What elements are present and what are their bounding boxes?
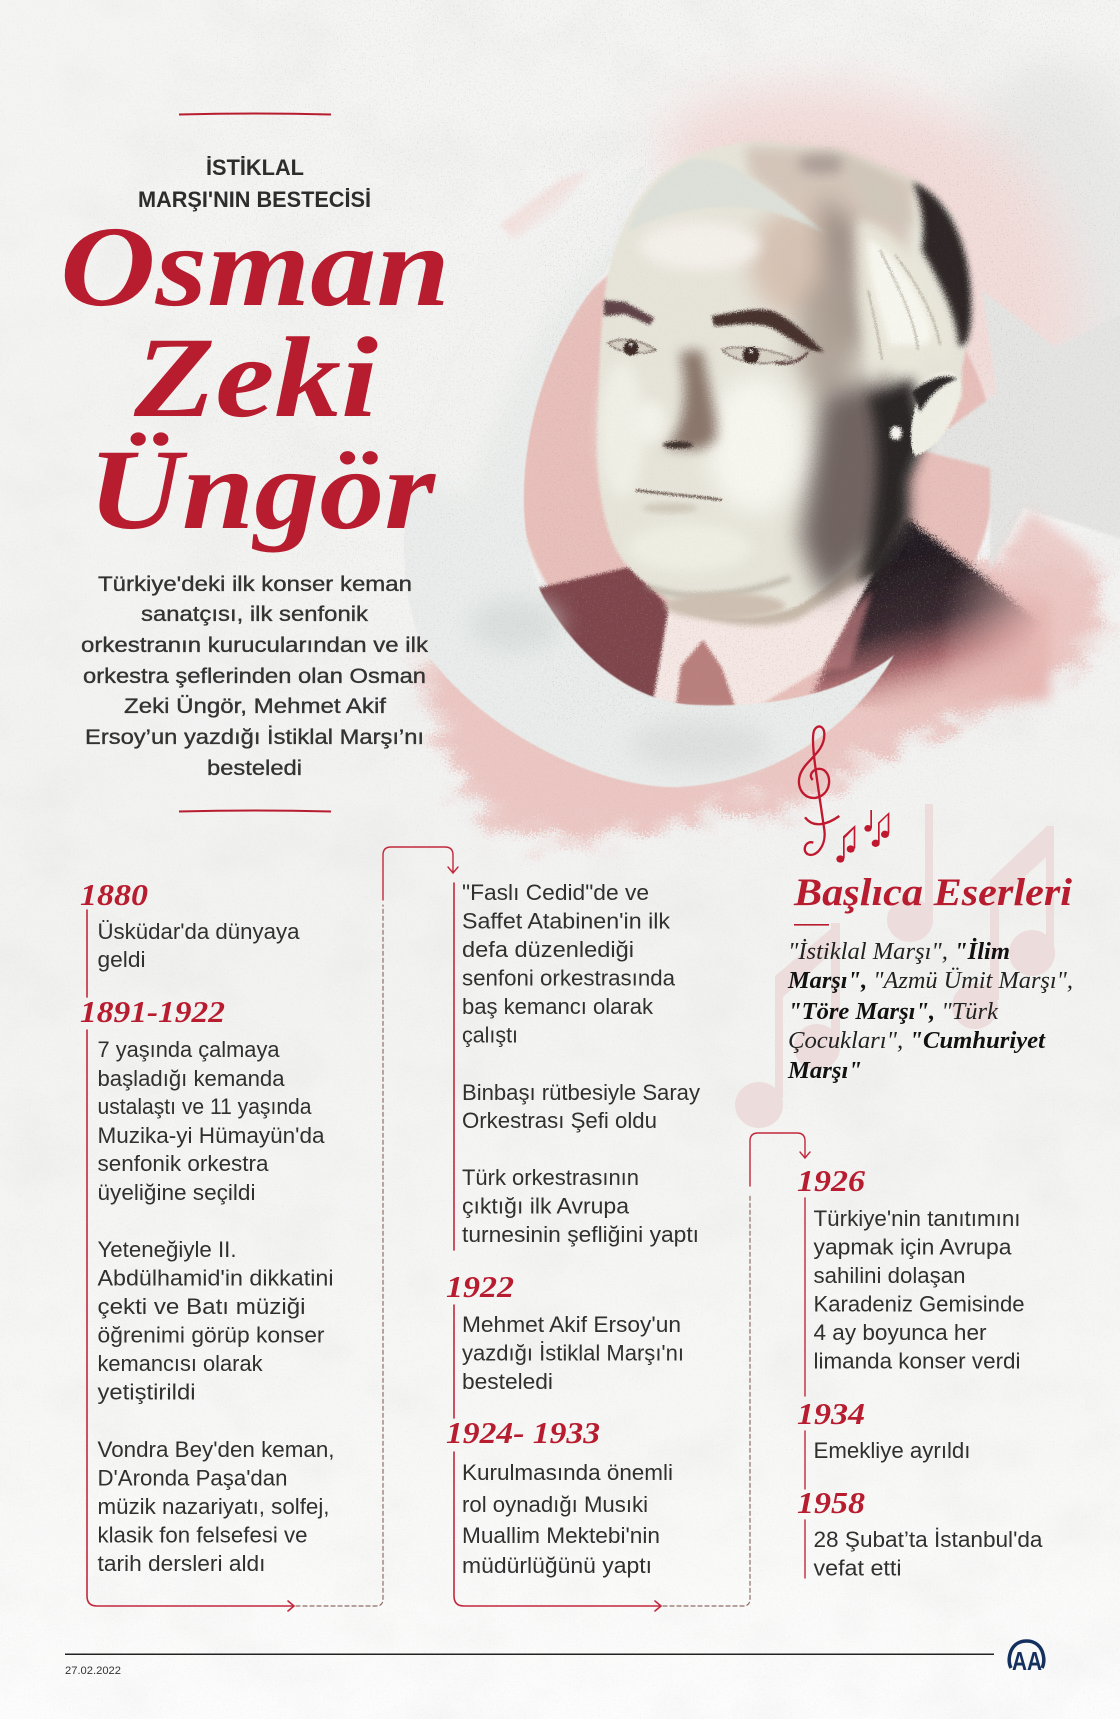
ear xyxy=(890,372,961,456)
intro text: Ersoy’un yazdığı İstiklal Marşı’nı xyxy=(85,726,424,749)
text 1891-1922: çekti ve Batı müziği xyxy=(98,1294,306,1319)
crown tint xyxy=(745,146,914,300)
connector 1 to 2 dashed xyxy=(296,905,383,1606)
main works list: Çocukları", "Cumhuriyet xyxy=(788,1027,1046,1054)
text 1891-1922: kemancısı olarak xyxy=(98,1351,263,1376)
text continuing 1891-1922: Türk orkestrasının xyxy=(462,1165,639,1190)
text continuing 1891-1922: çalıştı xyxy=(462,1022,518,1048)
text 1880: Üsküdar'da dünyaya xyxy=(98,919,300,944)
text 1891-1922: ustalaştı ve 11 yaşında xyxy=(98,1094,312,1119)
nose highlight xyxy=(634,401,666,443)
suit collar side tint xyxy=(820,590,872,672)
footer rule xyxy=(65,1654,994,1655)
chin crease xyxy=(645,578,790,596)
text 1926 xyxy=(814,1206,1024,1374)
text 1891-1922: öğrenimi görüp konser xyxy=(98,1322,324,1348)
text 1891-1922: klasik fon felsefesi ve xyxy=(98,1522,308,1548)
crown grey patch xyxy=(798,154,846,174)
year 1880: 1880 xyxy=(80,877,148,912)
forehead pink shade xyxy=(749,207,841,317)
column 1 lines xyxy=(87,910,294,1611)
white crescent xyxy=(404,165,894,787)
main works list: "Töre Marşı", "Türk xyxy=(788,998,999,1025)
text continuing 1891-1922: baş kemancı olarak xyxy=(462,994,654,1019)
timeline connectors xyxy=(87,847,810,1611)
text continuing 1891-1922: turnesinin şefliğini yaptı xyxy=(462,1222,699,1247)
title: name: Zeki xyxy=(133,314,378,441)
footer date: 27.02.2022 xyxy=(65,1665,121,1677)
year 1922: 1922 xyxy=(446,1269,514,1304)
intro text: besteledi xyxy=(207,757,302,780)
text 1891-1922: Vondra Bey'den keman, xyxy=(98,1437,334,1462)
text 1926: yapmak için Avrupa xyxy=(814,1234,1012,1260)
left suit shoulder xyxy=(530,567,672,720)
text continuing 1891-1922: senfoni orkestrasında xyxy=(462,966,676,990)
mouth xyxy=(636,490,722,500)
temple shade xyxy=(822,195,862,350)
face highlights xyxy=(707,377,803,513)
heading: subtitle: İSTİKLAL xyxy=(206,155,304,180)
text 1891-1922: 7 yaşında çalmaya xyxy=(98,1037,280,1062)
upper cheek shade xyxy=(796,280,860,400)
intro text xyxy=(81,573,429,780)
top divider xyxy=(179,114,331,115)
title: name: Üngör xyxy=(88,426,436,553)
forehead wedge highlight xyxy=(628,159,826,234)
text continuing 1891-1922: Saffet Atabinen'in ilk xyxy=(462,908,671,934)
dark hair xyxy=(913,182,971,346)
timeline: column 3 xyxy=(797,1163,1043,1580)
white hair soft base xyxy=(857,218,953,385)
forehead highlight xyxy=(640,222,760,270)
year 1924-1933: 1924- 1933 xyxy=(446,1415,600,1450)
text 1891-1922: üyeliğine seçildi xyxy=(98,1180,256,1205)
year 1926: 1926 xyxy=(797,1163,866,1198)
text 1926: limanda konser verdi xyxy=(814,1348,1020,1374)
connector 2 to 3 top arrow xyxy=(750,1133,810,1186)
text 1922: besteledi xyxy=(462,1369,553,1394)
white hair bright xyxy=(868,240,931,345)
intro text: sanatçısı, ilk senfonik xyxy=(141,603,369,626)
short divider xyxy=(794,924,829,926)
right suit fade xyxy=(945,560,1050,700)
intro text: Zeki Üngör, Mehmet Akif xyxy=(124,695,386,718)
timeline: column 2 xyxy=(446,880,700,1578)
title: name xyxy=(60,203,450,553)
bottom divider xyxy=(179,810,331,812)
cheek shade xyxy=(800,375,905,600)
text 1922: yazdığı İstiklal Marşı'nı xyxy=(462,1340,684,1366)
crescent shading: bottom xyxy=(630,721,770,769)
text 1924-1933: rol oynadığı Musıki xyxy=(462,1492,648,1517)
intro text: orkestra şeflerinden olan Osman xyxy=(83,665,426,688)
heading: subtitle: MARŞI'NIN BESTECİSİ xyxy=(138,187,371,212)
column 3 lines xyxy=(804,1198,806,1578)
background: red flag brush with crescent and star xyxy=(425,60,1120,839)
text 1926: 4 ay boyunca her xyxy=(814,1320,986,1345)
text 1891-1922: başladığı kemanda xyxy=(98,1066,285,1091)
text 1924-1933: müdürlüğünü yaptı xyxy=(462,1553,652,1578)
left eyebrow xyxy=(604,300,654,325)
icon: treble clef and notes xyxy=(799,726,889,863)
intro text: Türkiye'deki ilk konser keman xyxy=(98,573,412,596)
lower right star tip wash xyxy=(1000,510,1090,610)
text 1924-1933: Muallim Mektebi'nin xyxy=(462,1523,660,1548)
text 1924-1933: Kurulmasında önemli xyxy=(462,1460,673,1485)
pale top wash xyxy=(660,85,1080,420)
hair crown xyxy=(840,158,915,225)
nose shadow xyxy=(664,350,716,450)
tie xyxy=(674,640,738,720)
shirt collar xyxy=(650,572,874,720)
main works list xyxy=(787,937,1073,1084)
main works list: "İstiklal Marşı", "İlim xyxy=(788,937,1010,965)
text continuing 1891-1922: Binbaşı rütbesiyle Saray xyxy=(462,1080,700,1105)
wisp pink xyxy=(500,170,590,240)
portrait grain xyxy=(540,130,1040,720)
text 1891-1922: müzik nazariyatı, solfej, xyxy=(98,1494,330,1519)
crescent fade to paper on upper left xyxy=(400,140,650,500)
heading: main works: Başlıca Eserleri xyxy=(793,871,1072,914)
lower chin tint xyxy=(665,593,785,619)
year 1934: 1934 xyxy=(797,1396,865,1431)
text continuing 1891-1922: Orkestrası Şefi oldu xyxy=(462,1108,657,1133)
top right grey wash xyxy=(940,60,1120,480)
title: name: Osman xyxy=(60,203,450,330)
text 1891-1922: Abdülhamid'in dikkatini xyxy=(98,1266,334,1290)
portrait: Osman Zeki Üngör xyxy=(597,142,971,625)
text 1891-1922: yetiştirildi xyxy=(98,1380,196,1404)
pink brush wash: lower band xyxy=(425,560,1100,839)
text continuing 1891-1922: çıktığı ilk Avrupa xyxy=(462,1194,630,1218)
text 1926: sahilini dolaşan xyxy=(814,1263,966,1288)
text 1958: 28 Şubat’ta İstanbul'da xyxy=(814,1527,1043,1552)
text 1922 xyxy=(462,1312,684,1394)
main works list: Marşı", "Azmü Ümit Marşı", xyxy=(787,966,1073,994)
neck xyxy=(660,440,905,625)
text continuing 1891-1922: defa düzenlediği xyxy=(462,937,634,962)
text 1880: geldi xyxy=(98,947,146,972)
text 1924-1933 xyxy=(462,1460,673,1578)
head base xyxy=(597,142,970,617)
decorative music notes watermark xyxy=(735,804,1055,1128)
pink inner disc xyxy=(515,225,995,705)
text continuing 1891-1922: "Faslı Cedid"de ve xyxy=(462,880,649,905)
text 1891-1922: tarih dersleri aldı xyxy=(98,1551,266,1576)
text 1880 xyxy=(98,919,300,972)
text 1891-1922 xyxy=(98,1037,334,1576)
text 1958: vefat etti xyxy=(814,1556,902,1580)
icon: AA logo: AA xyxy=(1012,1646,1042,1676)
text 1934: Emekliye ayrıldı xyxy=(814,1438,970,1463)
timeline: column 1 xyxy=(80,877,334,1576)
text 1926: Türkiye'nin tanıtımını xyxy=(814,1206,1020,1231)
text 1891-1922: Yeteneğiyle II. xyxy=(98,1237,236,1262)
text 1926: Karadeniz Gemisinde xyxy=(814,1292,1024,1316)
nostril xyxy=(663,441,693,449)
year 1958: 1958 xyxy=(797,1485,866,1520)
connector 1 to 2 top arrow xyxy=(383,847,458,900)
crescent shading: shoulder xyxy=(470,599,560,651)
lower lip shade xyxy=(642,503,698,513)
portrait: suit and collar xyxy=(530,518,1050,720)
text 1958 xyxy=(814,1527,1043,1580)
text 1891-1922: Muzika-yi Hümayün'da xyxy=(98,1123,325,1148)
connector 2 to 3 dashed xyxy=(663,1195,750,1606)
column 2 lines xyxy=(454,883,661,1611)
heading: subtitle xyxy=(138,155,371,212)
text continuing 1891-1922 xyxy=(462,880,700,1247)
right suit shoulder xyxy=(810,518,1040,715)
text 1922: Mehmet Akif Ersoy'un xyxy=(462,1312,681,1337)
neck and hairline shadow xyxy=(856,378,925,585)
hair strands xyxy=(868,250,940,360)
text 1891-1922: D'Aronda Paşa'dan xyxy=(98,1466,288,1490)
main works list: Marşı" xyxy=(787,1057,862,1084)
left eye xyxy=(608,340,656,356)
right eyebrow xyxy=(712,309,824,352)
right eye xyxy=(722,346,808,364)
icon: AA logo xyxy=(1009,1641,1044,1676)
intro text: orkestranın kurucularından ve ilk xyxy=(81,634,429,657)
year 1891-1922: 1891-1922 xyxy=(80,994,225,1029)
right suit-side pink xyxy=(900,590,1090,680)
text 1891-1922: senfonik orkestra xyxy=(98,1151,269,1176)
star xyxy=(919,290,1120,570)
